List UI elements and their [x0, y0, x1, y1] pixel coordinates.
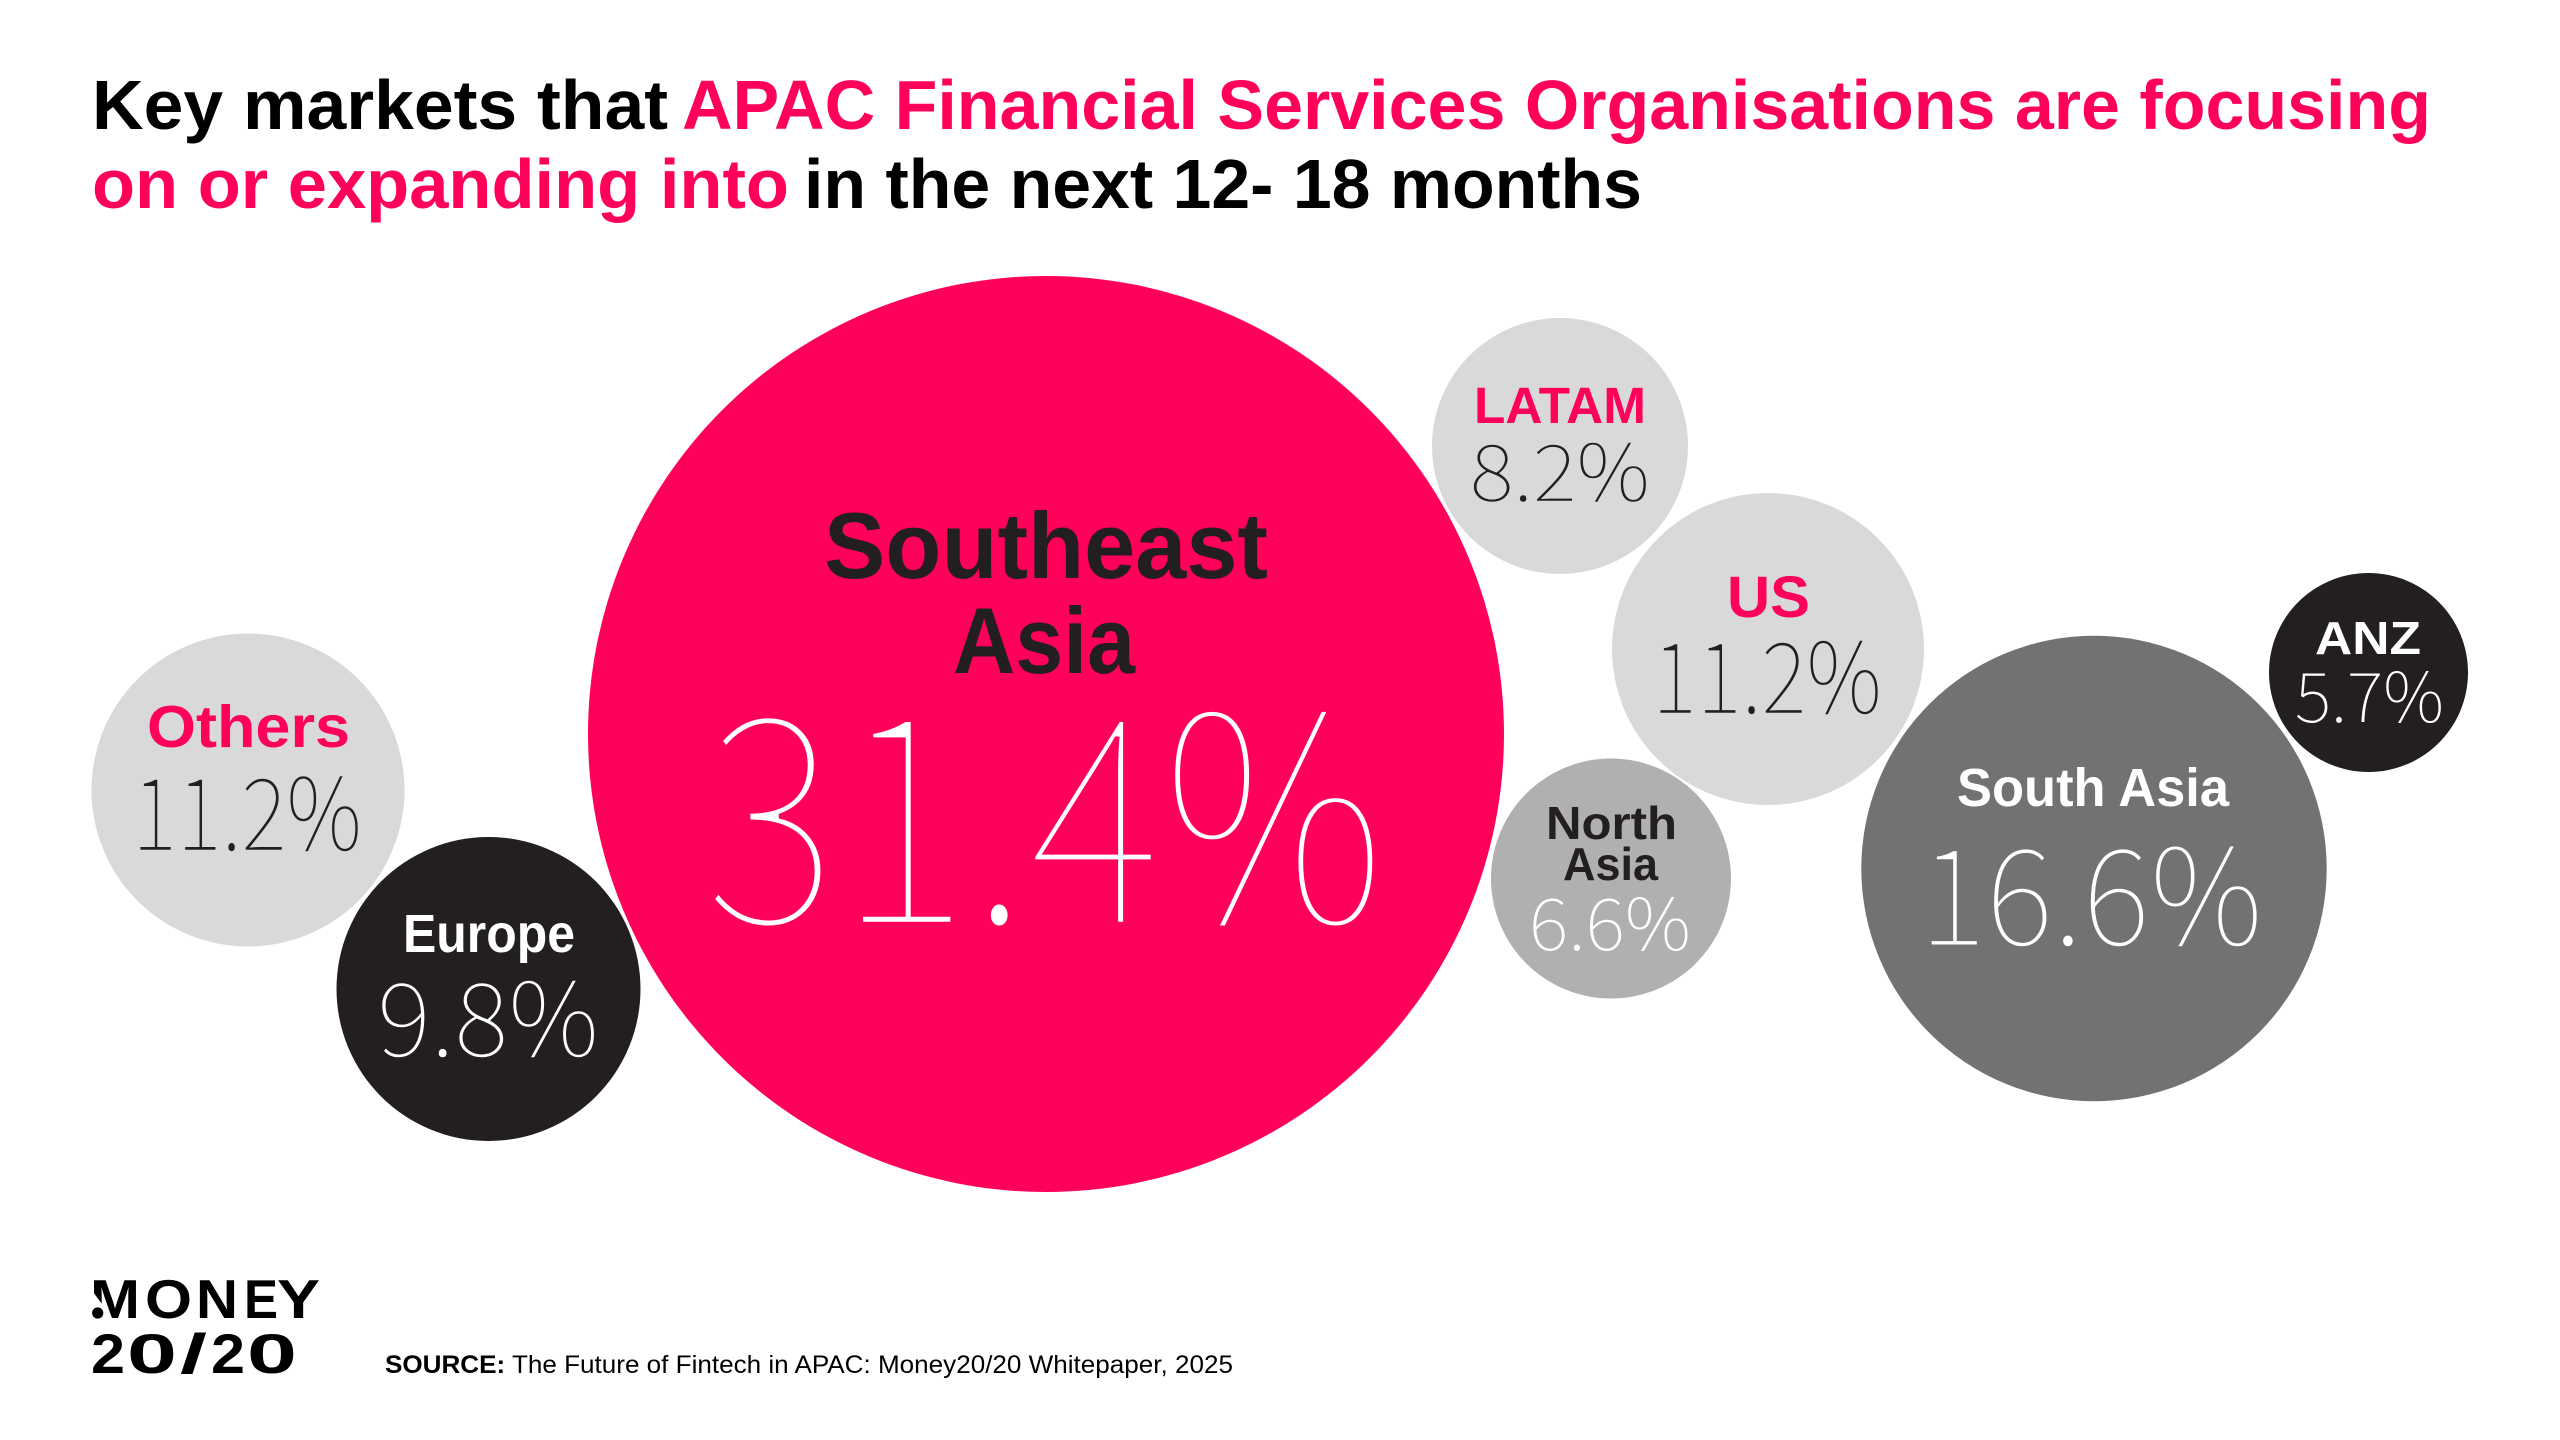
logo: Money20/20: 2	[211, 1322, 245, 1385]
bubble: Europe: 9.8%	[377, 939, 599, 1086]
bubble: US	[1612, 493, 1924, 805]
logo: Money20/20: 0	[127, 1322, 177, 1385]
bubble: Others: Others	[147, 694, 350, 760]
bubble: Southeast Asia	[588, 276, 1504, 1192]
logo: Money20/20: E	[244, 1268, 278, 1330]
bubble: US: 11.2%	[1652, 600, 1882, 742]
title: in the next 12- 18 months	[804, 145, 1642, 223]
bubble: Europe: Europe	[403, 904, 575, 964]
title: Key markets that	[92, 66, 668, 144]
bubble: Others: 11.2%	[132, 734, 362, 879]
logo: Money20/20: O	[145, 1268, 192, 1330]
bubble: North Asia: 6.6%	[1529, 866, 1691, 971]
bubble: LATAM: LATAM	[1474, 377, 1646, 434]
title: on or expanding into	[92, 145, 789, 223]
bubble: South Asia	[1861, 636, 2327, 1101]
bubble: Southeast Asia: Southeast	[824, 493, 1268, 598]
bubble: Others	[92, 634, 404, 946]
bubble: ANZ: ANZ	[2315, 612, 2421, 664]
title: APAC Financial Services Organisations are focusing	[682, 66, 2431, 144]
bubble: Southeast Asia: Asia	[953, 588, 1136, 693]
logo: Money20/20: /	[180, 1322, 208, 1385]
logo: Money20/20: 0	[247, 1322, 297, 1385]
source note: SOURCE: The Future of Fintech in APAC: Money20/20 Whitepaper, 2025	[385, 1351, 1233, 1379]
bubble: South Asia: 16.6%	[1919, 790, 2263, 984]
bubble: Europe	[336, 837, 640, 1141]
bubble: LATAM	[1432, 318, 1688, 574]
logo: Money20/20: M	[90, 1268, 140, 1330]
logo: Money20/20: N	[196, 1268, 238, 1330]
bubble: Southeast Asia: 31.4%	[704, 588, 1386, 1008]
bubble: US: US	[1727, 565, 1810, 630]
title	[92, 66, 2431, 223]
logo: Money20/20	[88, 1268, 320, 1385]
bubble: North Asia	[1491, 758, 1731, 998]
bubble: North Asia: Asia	[1563, 838, 1658, 890]
logo: Money20/20: Y	[277, 1268, 320, 1330]
bubble: LATAM: 8.2%	[1470, 409, 1650, 524]
logo: Money20/20: 2	[91, 1322, 125, 1385]
bubble: South Asia: South Asia	[1957, 758, 2230, 818]
bubble: North Asia: North	[1546, 797, 1677, 849]
bubble: ANZ	[2269, 573, 2468, 772]
bubble: ANZ: 5.7%	[2295, 642, 2444, 742]
